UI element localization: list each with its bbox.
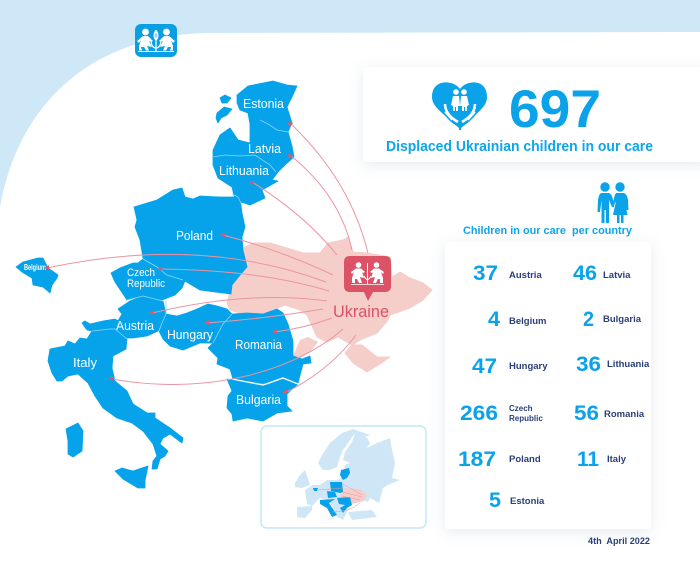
map: Czech Republic [111, 259, 185, 300]
row: Czech Republic: 266 [460, 402, 498, 425]
label: Belgium: Belgium [24, 263, 46, 272]
arrows from Ukraine [44, 122, 368, 393]
row: Hungary [472, 355, 548, 378]
row: Hungary: Hungary [509, 361, 548, 372]
map: Belgium [16, 258, 58, 293]
label: Italy: Italy [73, 355, 98, 370]
icon: heart with hands and children [432, 82, 487, 130]
row: Romania: Romania [604, 409, 645, 420]
row: Austria: Austria [509, 270, 542, 281]
map: Bulgaria [227, 379, 298, 421]
row: Belgium: 4 [488, 308, 500, 331]
map: Latvia [213, 120, 294, 172]
row: Bulgaria [583, 308, 642, 331]
logo: SOS Children's Villages [135, 24, 177, 57]
row: Italy [577, 448, 627, 471]
row: Bulgaria: Bulgaria [603, 314, 642, 325]
row: Latvia: Latvia [603, 270, 631, 281]
Ukraine pin icon [344, 256, 391, 301]
row: Belgium [488, 308, 546, 331]
map: Poland [134, 188, 247, 294]
map: Czech Republic: Republic [127, 278, 165, 290]
label: Romania: Romania [235, 337, 283, 352]
row: Latvia [573, 262, 631, 285]
row: Estonia [489, 489, 545, 512]
row: Poland: Poland [509, 454, 541, 465]
inset: Europe locator map [261, 426, 426, 528]
row: Poland: 187 [458, 448, 496, 471]
label: Bulgaria: Bulgaria [236, 392, 282, 407]
label: Czech Republic: Czech [127, 267, 155, 279]
map: Lithuania [213, 155, 278, 205]
label: Austria: Austria [116, 318, 155, 333]
row: Estonia: 5 [489, 489, 501, 512]
map: Estonia [216, 81, 297, 132]
row: Romania: 56 [574, 402, 599, 425]
label: Ukraine: Ukraine [333, 303, 389, 321]
caption: Displaced Ukrainian children in our care [386, 139, 653, 155]
row: Lithuania: 36 [576, 353, 601, 376]
row: Italy: Italy [607, 454, 627, 465]
panel: country table [445, 242, 651, 529]
row: Czech Republic: Republic [509, 414, 543, 423]
row: Lithuania [576, 353, 650, 376]
map of Ukraine [227, 237, 432, 372]
map: Hungary [159, 304, 232, 350]
panel: total displaced children [363, 67, 700, 162]
date: 4th April 2022 [588, 536, 650, 546]
label: Lithuania: Lithuania [219, 163, 270, 178]
heading: children per country: Children in our care per country [463, 225, 633, 237]
icon: two children [598, 182, 628, 223]
row: Poland [458, 448, 541, 471]
map: Austria [82, 296, 166, 338]
map: Italy [48, 329, 183, 488]
row: Czech Republic [460, 402, 543, 425]
row: Austria [473, 262, 542, 285]
label: Latvia: Latvia [248, 141, 282, 156]
label: Estonia: Estonia [243, 96, 285, 111]
row: Italy: 11 [577, 448, 599, 471]
row: Belgium: Belgium [509, 316, 546, 327]
row: Romania [574, 402, 645, 425]
label: Poland: Poland [176, 228, 213, 243]
label: Hungary: Hungary [167, 327, 213, 342]
row: Hungary: 47 [472, 355, 497, 378]
total number: 697 [509, 80, 601, 139]
row: Czech Republic: Czech [509, 404, 533, 413]
row: Austria: 37 [473, 262, 498, 285]
map: Romania [208, 309, 311, 384]
row: Latvia: 46 [573, 262, 597, 285]
row: Lithuania: Lithuania [607, 359, 650, 370]
row: Bulgaria: 2 [583, 308, 594, 331]
row: Estonia: Estonia [510, 496, 545, 507]
